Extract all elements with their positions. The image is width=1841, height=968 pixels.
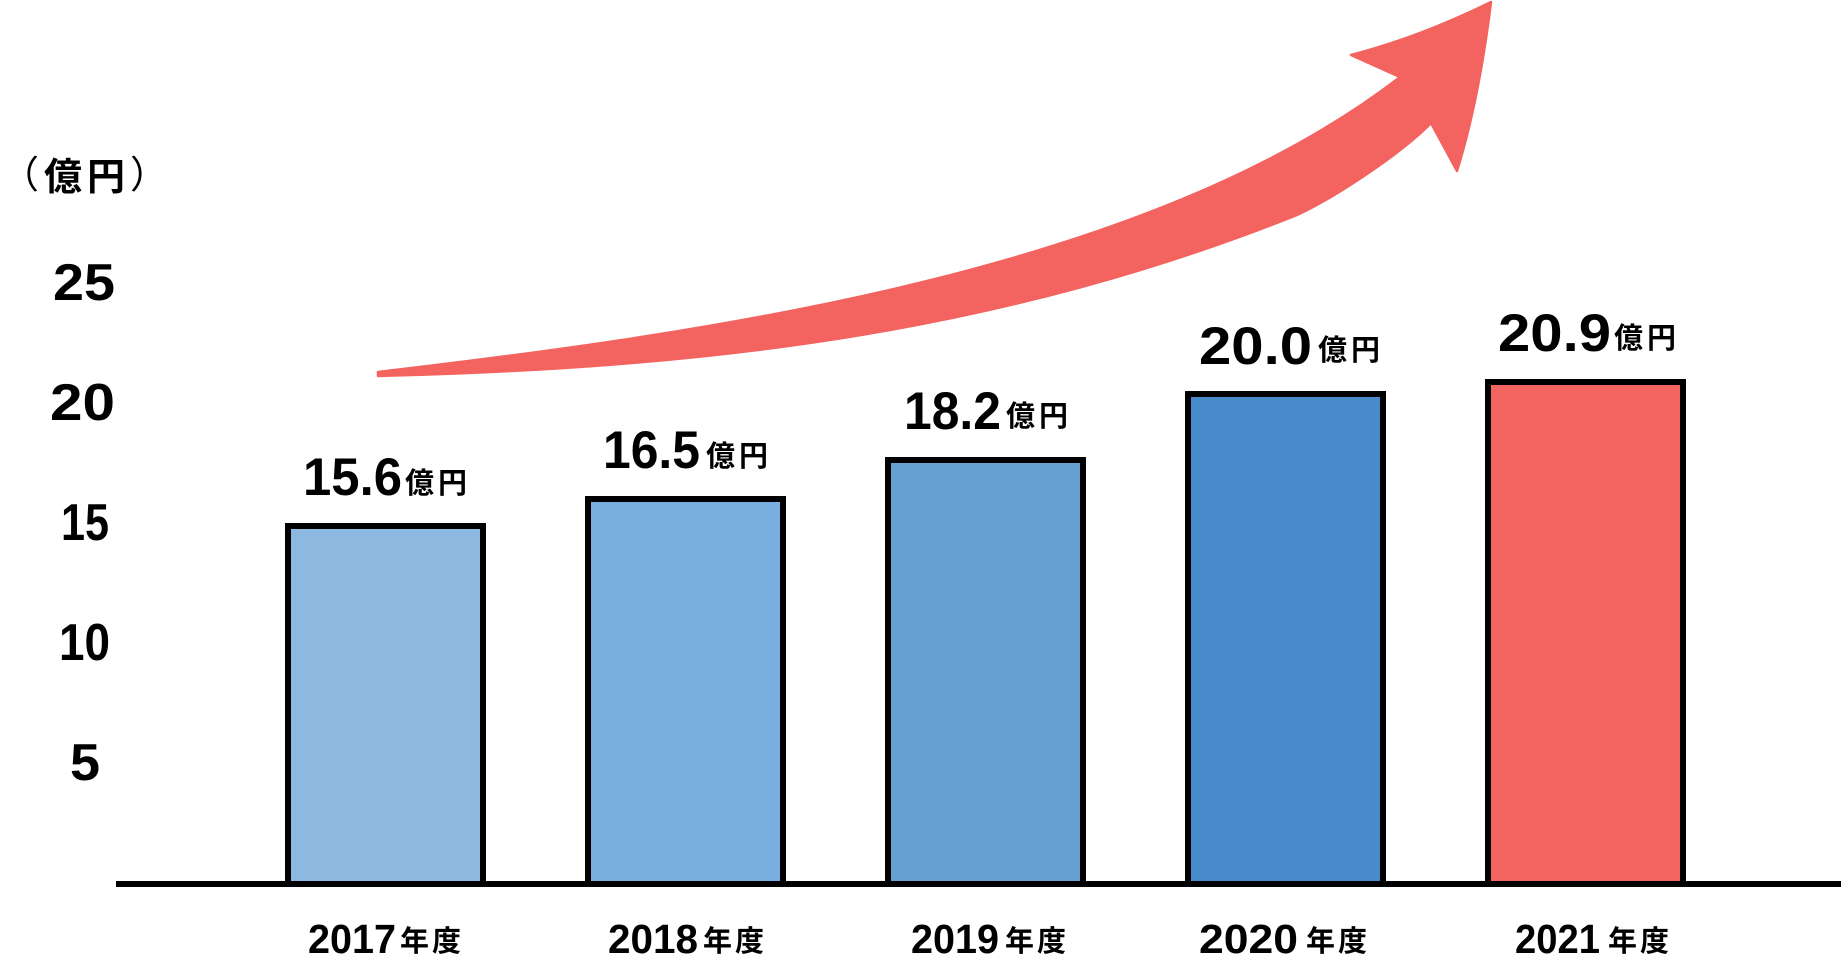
category label: 2021: 年度: [1608, 925, 1672, 958]
value label: 2019: 18.2: [904, 382, 1001, 441]
category label: 2018: 2018: [608, 916, 698, 962]
y axis numbers: 10: [59, 614, 110, 672]
value label: 2021: 20.9: [1498, 304, 1611, 363]
category label: 2017: [308, 916, 464, 962]
category label: 2020: 2020: [1199, 916, 1298, 962]
value label: 2020: 20.0: [1199, 317, 1312, 376]
value label: 2019: 億円: [1006, 400, 1072, 433]
value label: 2018: 16.5: [603, 421, 700, 480]
value label: 2020: 億円: [1318, 334, 1384, 367]
bar: 2019: [888, 460, 1083, 884]
axis unit label: 円: [87, 157, 125, 199]
axis unit label: （: [1, 155, 39, 197]
y axis numbers: [50, 254, 115, 792]
y axis numbers: 15: [61, 494, 109, 552]
value label: 2020: [1199, 317, 1384, 376]
value label: 2017: 15.6: [303, 448, 402, 507]
axis unit label: ）: [130, 155, 168, 197]
category label: 2018: [608, 916, 767, 962]
category label: 2020: 年度: [1306, 925, 1370, 958]
growth arrow: [378, 2, 1491, 376]
axis unit label: 億: [44, 157, 82, 199]
value label: 2019: [904, 382, 1072, 441]
bar: 2017: [288, 526, 483, 884]
category label: 2021: 2021: [1515, 916, 1600, 962]
value label: 2017: 億円: [405, 467, 471, 500]
y axis numbers: 5: [70, 734, 100, 792]
bar: 2018: [588, 499, 783, 884]
category label: 2020: [1199, 916, 1370, 962]
category label: 2019: 年度: [1005, 925, 1069, 958]
category label: 2018: 年度: [703, 925, 767, 958]
value label: 2021: [1498, 304, 1680, 363]
x axis baseline: [116, 881, 1841, 887]
category label: 2017: 2017: [308, 916, 396, 962]
y axis numbers: 20: [50, 374, 115, 432]
value label: 2021: 億円: [1614, 322, 1680, 355]
axis unit label: [1, 155, 168, 199]
bar: 2021: [1488, 382, 1683, 884]
category label: 2019: [911, 916, 1069, 962]
value label: 2018: 億円: [706, 440, 772, 473]
category label: 2021: [1515, 916, 1672, 962]
value label: 2018: [603, 421, 772, 480]
category label: 2017: 年度: [400, 925, 464, 958]
bar: 2020: [1188, 394, 1383, 884]
category label: 2019: 2019: [911, 916, 999, 962]
y axis numbers: 25: [53, 254, 115, 312]
value label: 2017: [303, 448, 471, 507]
